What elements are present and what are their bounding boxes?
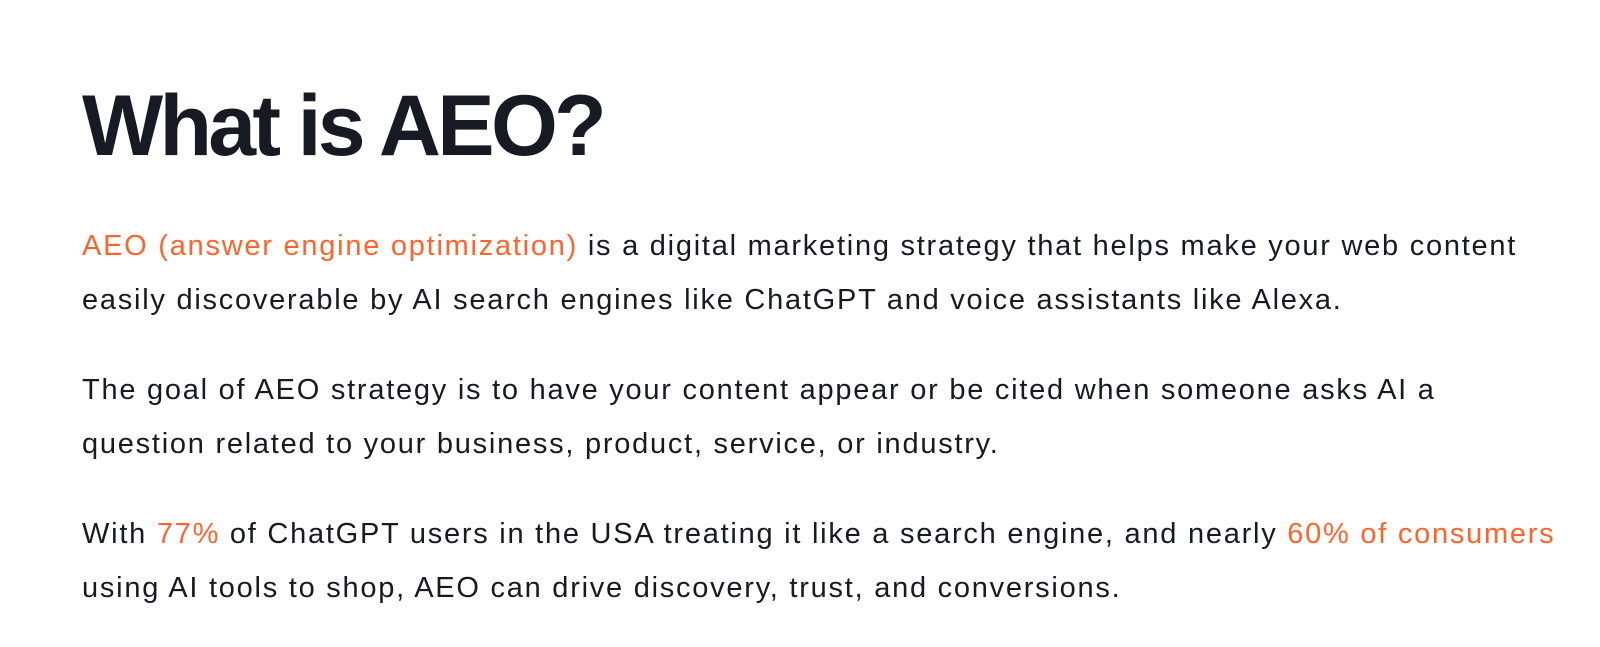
paragraph: statistics (82, 518, 1555, 604)
paragraph: definition (82, 230, 1517, 316)
paragraph: definition: AEO (answer engine optimization) is a digital marketing strategy that helps make your web content (82, 230, 1517, 262)
paragraph: statistics: using AI tools to shop, AEO can drive discovery, trust, and conversions. (82, 572, 1121, 604)
title: What is AEO? (82, 78, 603, 174)
paragraph: goal: The goal of AEO strategy is to have your content appear or be cited when someone asks AI a (82, 374, 1436, 406)
paragraph: goal: question related to your business, product, service, or industry. (82, 428, 1000, 460)
paragraph: definition: easily discoverable by AI search engines like ChatGPT and voice assistants like Alexa. (82, 284, 1343, 316)
paragraph: goal (82, 374, 1436, 460)
paragraph: statistics: With 77% of ChatGPT users in the USA treating it like a search engine, and nearly 60% of consumers (82, 518, 1555, 550)
